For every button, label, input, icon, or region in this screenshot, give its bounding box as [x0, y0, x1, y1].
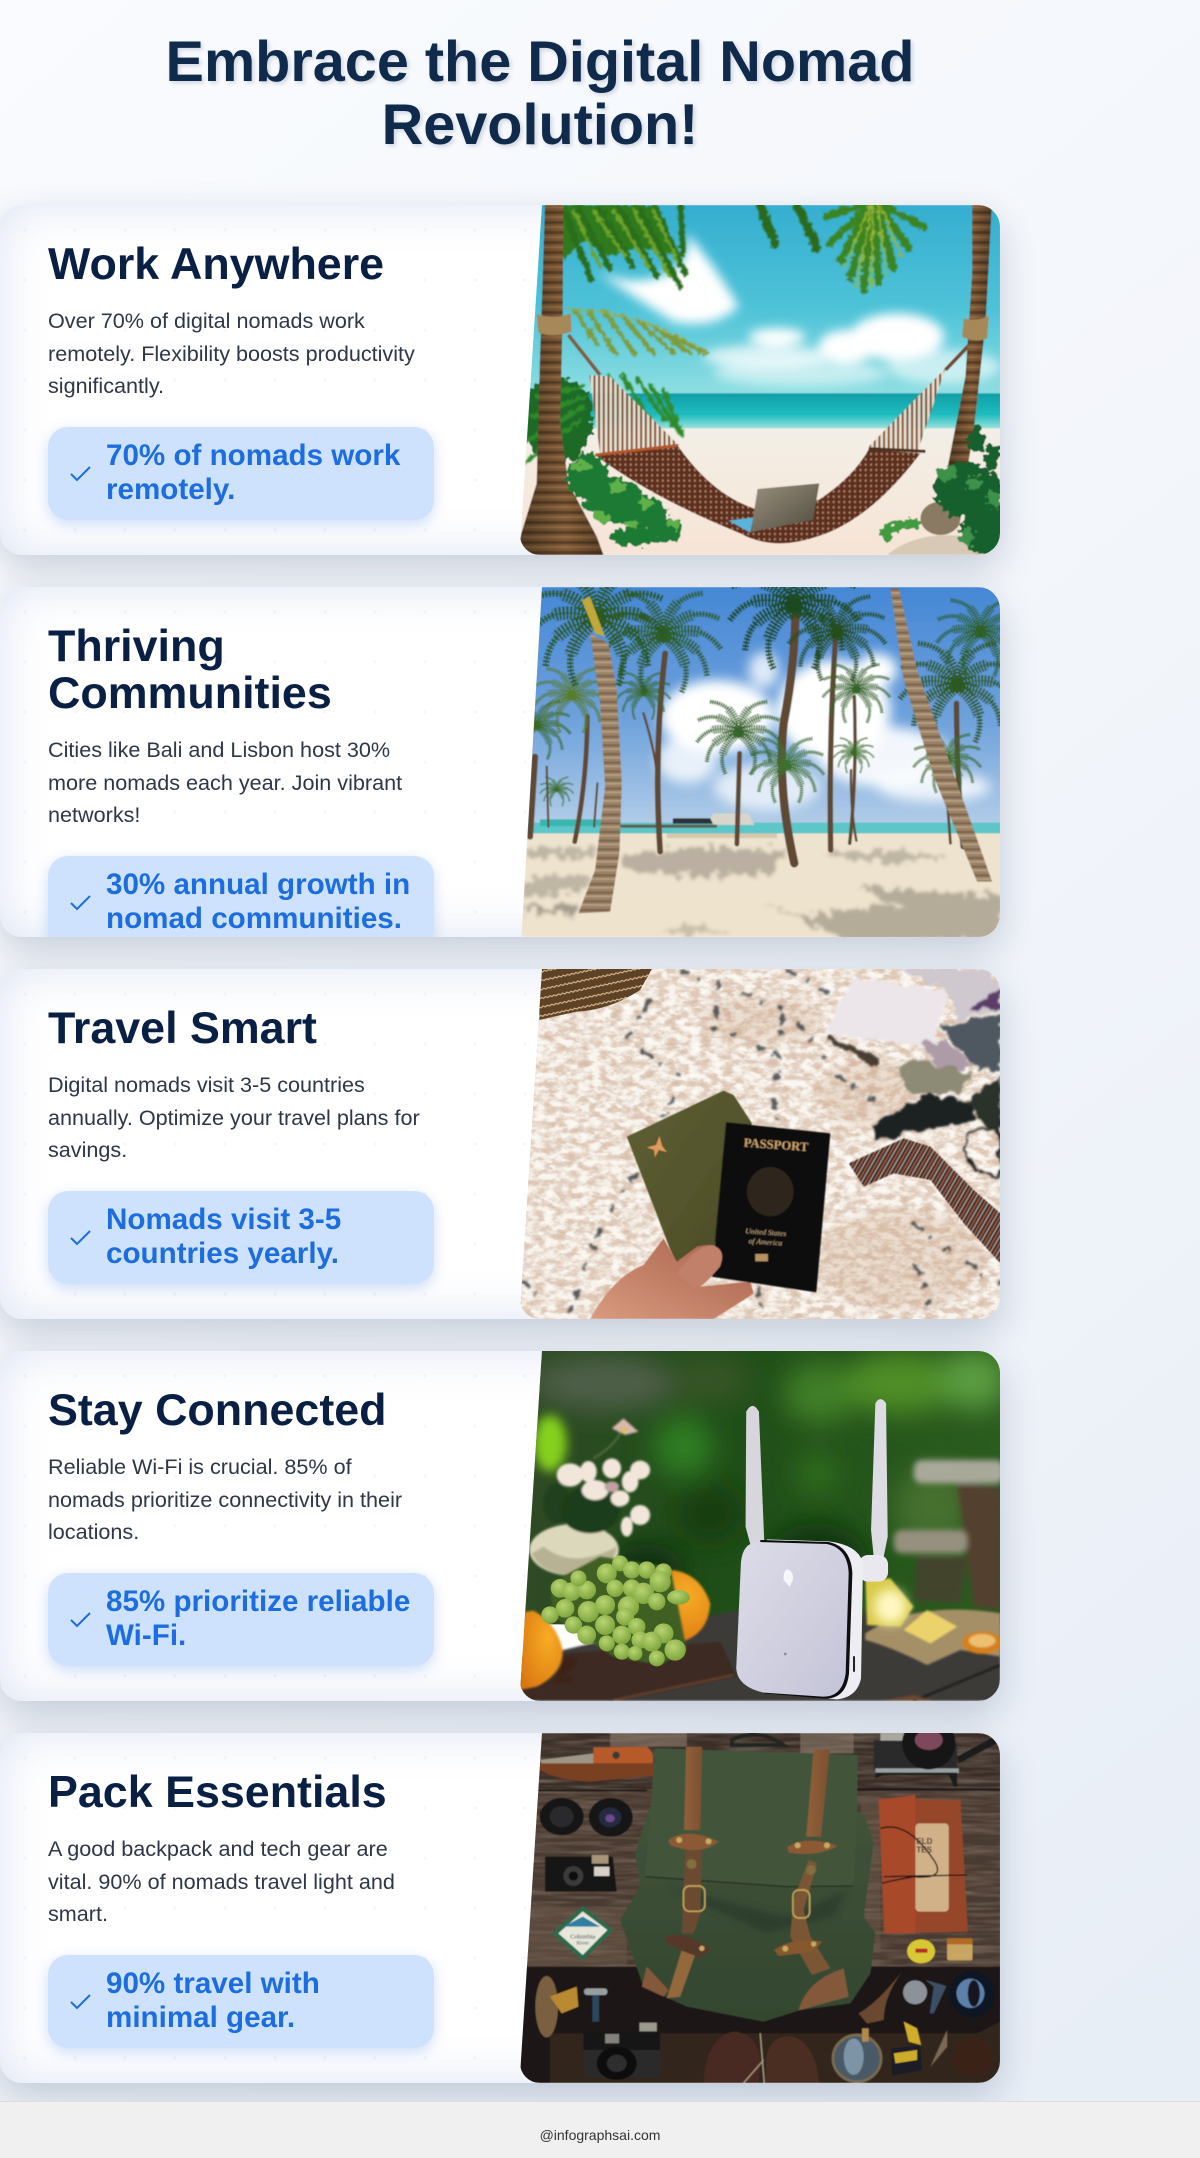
text: pack essentials description: smart. [48, 1901, 108, 1926]
palm fronds, middle and lower left [520, 309, 706, 463]
palm crowns [503, 548, 1024, 806]
laptop [728, 483, 819, 533]
jetty and resort building [540, 813, 776, 838]
callout text: remotely. [106, 473, 235, 506]
main foreground trunk [578, 633, 621, 913]
magnifying glass and matchbox [832, 2022, 992, 2082]
footer [0, 2101, 1200, 2158]
backpack straps and buckles [641, 1747, 848, 2010]
black passport: United States [744, 1226, 786, 1238]
backpack body [620, 1734, 875, 2022]
lip balm tins [907, 1938, 972, 1963]
lens bottom right and film [858, 1971, 994, 2023]
callout text [106, 868, 410, 935]
panel: pack essentials [0, 1733, 1000, 2083]
callout: 85 percent [48, 1573, 434, 1666]
text: pack essentials description: A good backpack and tech gear are [48, 1836, 388, 1861]
blurred garden background [520, 1351, 1000, 1624]
text: stay connected description: locations. [48, 1519, 139, 1544]
camera top right [873, 1717, 997, 1787]
text: work anywhere description: Over 70% of digital nomads work [48, 308, 365, 333]
callout: 3-5 countries [48, 1191, 434, 1284]
rug texture [520, 969, 1000, 1319]
palm fronds, upper centre and right [760, 205, 923, 289]
callout text: countries yearly. [106, 1237, 339, 1270]
callout text [106, 439, 400, 506]
leaning foreground trunk [890, 588, 992, 882]
wooden table [520, 1610, 1000, 1701]
oranges [520, 1570, 710, 1690]
text: thriving communities description: more nomads each year. Join vibrant [48, 770, 402, 795]
callout text [106, 1967, 320, 2034]
text: pack essentials description: vital. 90% of nomads travel light and [48, 1869, 395, 1894]
photo: flat lay of backpack and travel gear [520, 1733, 1000, 2083]
text: stay connected description: Reliable Wi-Fi is crucial. 85% of [48, 1454, 352, 1479]
icon: check mark [70, 1612, 91, 1628]
field notes notebook [878, 1795, 967, 1933]
callout text: minimal gear. [106, 2001, 295, 2034]
callout: 30 percent [48, 856, 434, 949]
icon: check mark [70, 1230, 91, 1246]
rug warm patches [700, 997, 983, 1310]
photo: palm trees on a white sand beach [522, 587, 1000, 937]
text: travel smart description [48, 1072, 420, 1162]
vase and flowers [529, 1418, 650, 1576]
title [166, 30, 914, 157]
text: travel smart description: Digital nomads visit 3-5 countries [48, 1072, 365, 1097]
hand [590, 1238, 753, 1319]
palm trunks [530, 603, 963, 863]
heading: travel smart: Travel Smart [48, 1003, 317, 1053]
router body [736, 1539, 888, 1699]
rug diamond lines [520, 970, 1000, 1317]
clouds [656, 652, 990, 810]
text: thriving communities description: Cities like Bali and Lisbon host 30% [48, 737, 390, 762]
text: stay connected description [48, 1454, 402, 1544]
footer: @infographsai.com [540, 2127, 660, 2143]
text: travel smart description: savings. [48, 1137, 127, 1162]
text: work anywhere description: significantly. [48, 373, 164, 398]
heading: thriving communities: Communities [48, 668, 332, 718]
text: work anywhere description: remotely. Flexibility boosts productivity [48, 341, 415, 366]
heading: thriving communities: Thriving [48, 621, 225, 671]
blurred bench [893, 1460, 1003, 1610]
callout text [106, 1203, 341, 1270]
text: pack essentials description [48, 1836, 395, 1926]
black passport: PASSPORT [743, 1136, 809, 1154]
lemon, cheese and napkin [865, 1578, 1002, 1665]
sea and horizon [528, 822, 1000, 834]
heading: work anywhere: Work Anywhere [48, 239, 384, 289]
callout text: Nomads visit 3-5 [106, 1203, 341, 1236]
thumb [678, 1244, 724, 1284]
icon: check mark [70, 466, 91, 482]
callout text: 70% of nomads work [106, 439, 400, 472]
clouds [596, 233, 1000, 386]
sea [520, 393, 1000, 432]
callout text: 90% travel with [106, 1967, 320, 2000]
heading: pack essentials: Pack Essentials [48, 1767, 387, 1817]
folded clothes [825, 969, 1000, 1177]
wood planks [520, 1733, 1000, 2083]
river gorge patch: River [576, 1940, 589, 1946]
folding knife [540, 1747, 653, 1782]
palm fronds, upper left [543, 205, 685, 287]
sand [520, 428, 1000, 555]
photo: hammock and laptop on a tropical beach [520, 205, 1000, 555]
black passport [711, 1122, 830, 1292]
callout text: 30% annual growth in [106, 868, 410, 901]
river gorge patch [551, 1906, 613, 1961]
panel: stay connected [0, 1351, 1000, 1701]
photo: wifi router on a table with fruit [520, 1351, 1000, 1701]
callout text: 85% prioritize reliable [106, 1585, 410, 1618]
olive passport cover [626, 1091, 751, 1267]
callout: 90 percent [48, 1955, 434, 2048]
river gorge patch: Columbia [570, 1933, 595, 1940]
icon: check mark [70, 1994, 91, 2010]
title: Embrace the Digital Nomad [166, 30, 914, 94]
panel: travel smart [0, 969, 1000, 1319]
disposable camera [545, 1855, 616, 1892]
router antennas [745, 1399, 887, 1557]
film canisters and leather pouch [535, 1976, 607, 2037]
right palm trunk [947, 205, 991, 470]
callout text: Wi-Fi. [106, 1619, 186, 1652]
sand [520, 833, 1000, 937]
callout: 70 percent [48, 427, 434, 520]
heading: stay connected: Stay Connected [48, 1385, 387, 1435]
striped strap [848, 1138, 1000, 1263]
callout text: nomad communities. [106, 902, 402, 935]
text: thriving communities description: networks! [48, 802, 140, 827]
camera bottom left [583, 2023, 660, 2080]
text: travel smart description: annually. Optimize your travel plans for [48, 1105, 420, 1130]
black passport: of America [748, 1236, 782, 1248]
left palm trunk [519, 205, 603, 555]
icon: check mark [70, 895, 91, 910]
woven basket [539, 969, 651, 1020]
callout text [106, 1585, 410, 1652]
text: thriving communities description [48, 737, 402, 827]
title: Revolution! [382, 93, 698, 157]
lenses [539, 1798, 632, 1837]
panel: thriving communities [0, 587, 1000, 937]
shadows on sand [523, 847, 1000, 940]
boots [703, 2032, 818, 2083]
photo: passports held over a shaggy rug [520, 969, 1000, 2076]
field notes notebook: TES [916, 1846, 932, 1855]
text: work anywhere description [48, 308, 415, 398]
heading: thriving communities [48, 621, 332, 718]
field notes notebook: ELD [916, 1837, 932, 1846]
panel: work anywhere [0, 205, 1000, 555]
hammock netting and ropes [568, 335, 977, 543]
text: stay connected description: nomads prioritize connectivity in their [48, 1487, 402, 1512]
grapes [541, 1555, 689, 1666]
foliage bushes [566, 428, 1007, 555]
